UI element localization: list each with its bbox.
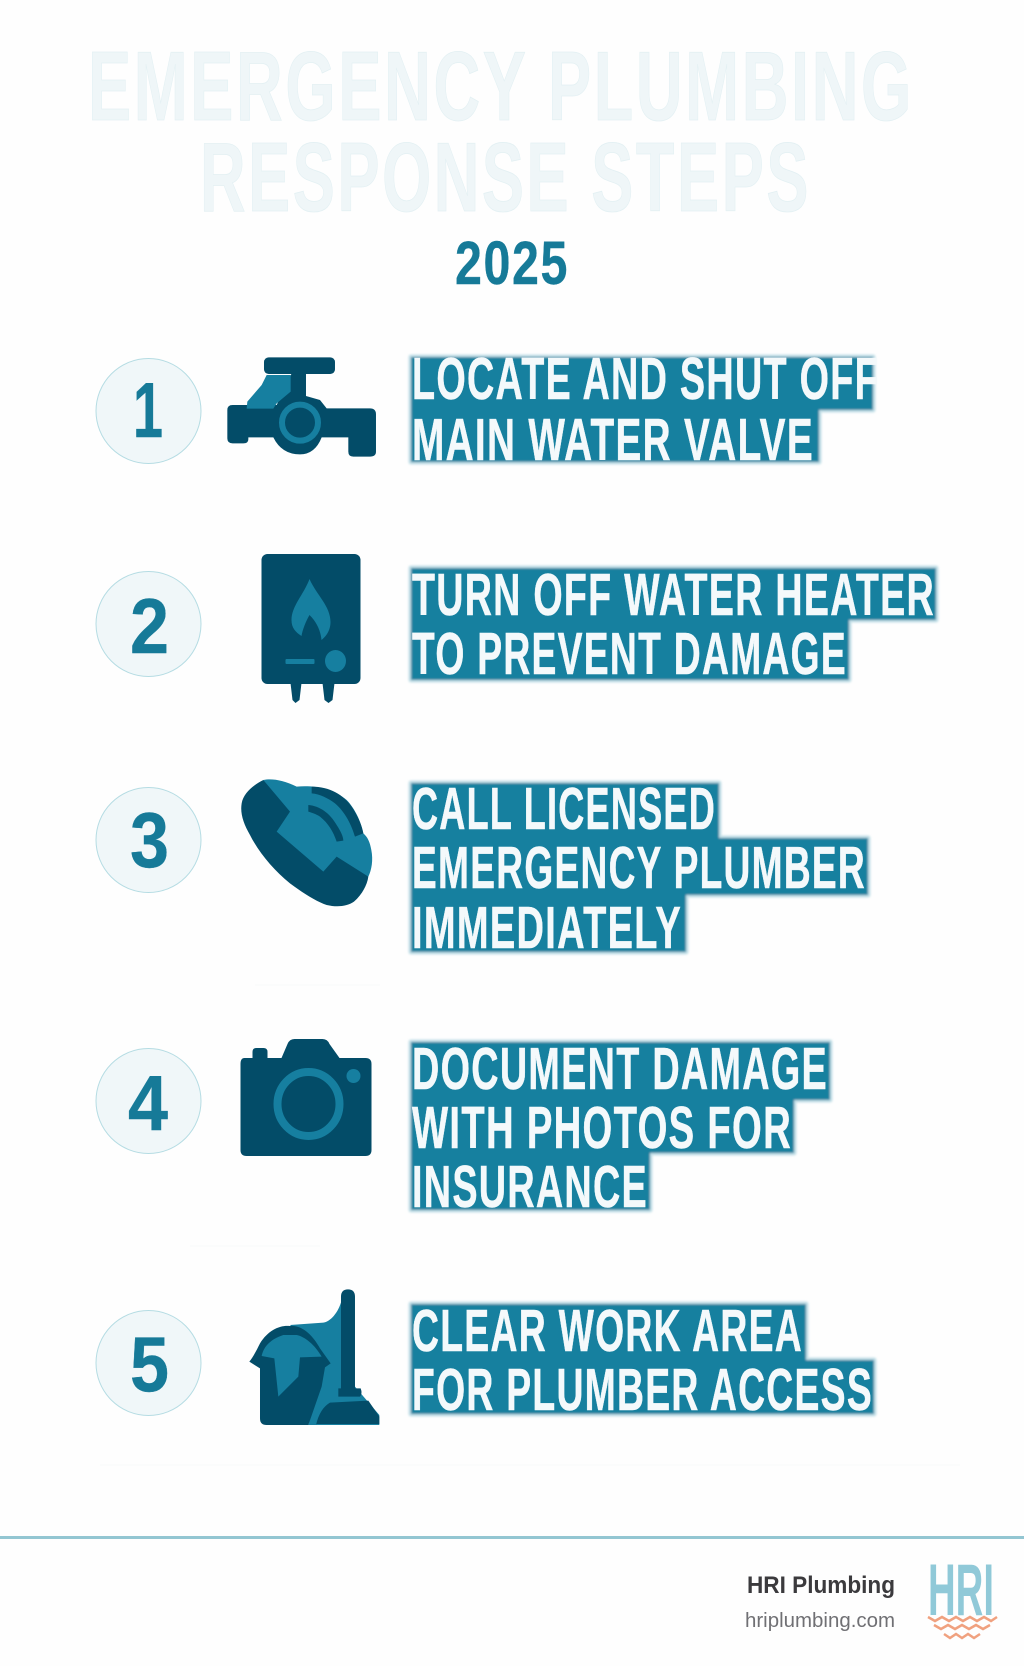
instruction band 3: IMMEDIATELY bbox=[412, 895, 682, 961]
instruction band 3: CALL LICENSED bbox=[412, 776, 716, 842]
instruction band 2 bbox=[411, 562, 936, 687]
number badge 4: 4 bbox=[128, 1059, 168, 1147]
instruction band 4 bbox=[411, 1036, 830, 1220]
number badge 4 bbox=[96, 1048, 201, 1154]
footer divider bbox=[0, 1536, 1024, 1539]
footer brand text bbox=[745, 1572, 895, 1632]
step 2 bbox=[96, 554, 936, 703]
number badge 3: 3 bbox=[130, 796, 169, 884]
number badge 1: 1 bbox=[133, 366, 163, 454]
icon: telephone bbox=[241, 779, 372, 906]
instruction band 1: MAIN WATER VALVE bbox=[412, 407, 814, 473]
instruction band 5 bbox=[411, 1298, 874, 1423]
step 4 bbox=[96, 1036, 830, 1220]
step 3 bbox=[96, 776, 868, 961]
instruction band 1 bbox=[411, 346, 879, 473]
icon: person and plunger bbox=[249, 1289, 379, 1425]
number badge 5: 5 bbox=[130, 1320, 169, 1408]
number badge 2 bbox=[96, 572, 201, 676]
number badge 2: 2 bbox=[130, 582, 169, 670]
logo: HRI with waves bbox=[928, 1550, 997, 1638]
subtitle: year: 2025 bbox=[455, 229, 569, 297]
footer brand text: hriplumbing.com bbox=[745, 1610, 895, 1632]
instruction band 5: CLEAR WORK AREA bbox=[412, 1298, 803, 1364]
icon: valve bbox=[227, 357, 376, 457]
title bbox=[88, 31, 914, 232]
icon: water heater bbox=[262, 554, 360, 703]
number badge 5 bbox=[96, 1310, 201, 1416]
number badge 1 bbox=[96, 358, 201, 464]
footer brand text: HRI Plumbing bbox=[747, 1572, 895, 1599]
icon: camera bbox=[240, 1039, 372, 1156]
instruction band 4: WITH PHOTOS FOR bbox=[412, 1095, 792, 1161]
step 1 bbox=[96, 346, 879, 473]
instruction band 3 bbox=[411, 776, 868, 961]
number badge 3 bbox=[96, 788, 201, 892]
instruction band 4: INSURANCE bbox=[412, 1154, 648, 1220]
step 5 bbox=[96, 1289, 874, 1425]
